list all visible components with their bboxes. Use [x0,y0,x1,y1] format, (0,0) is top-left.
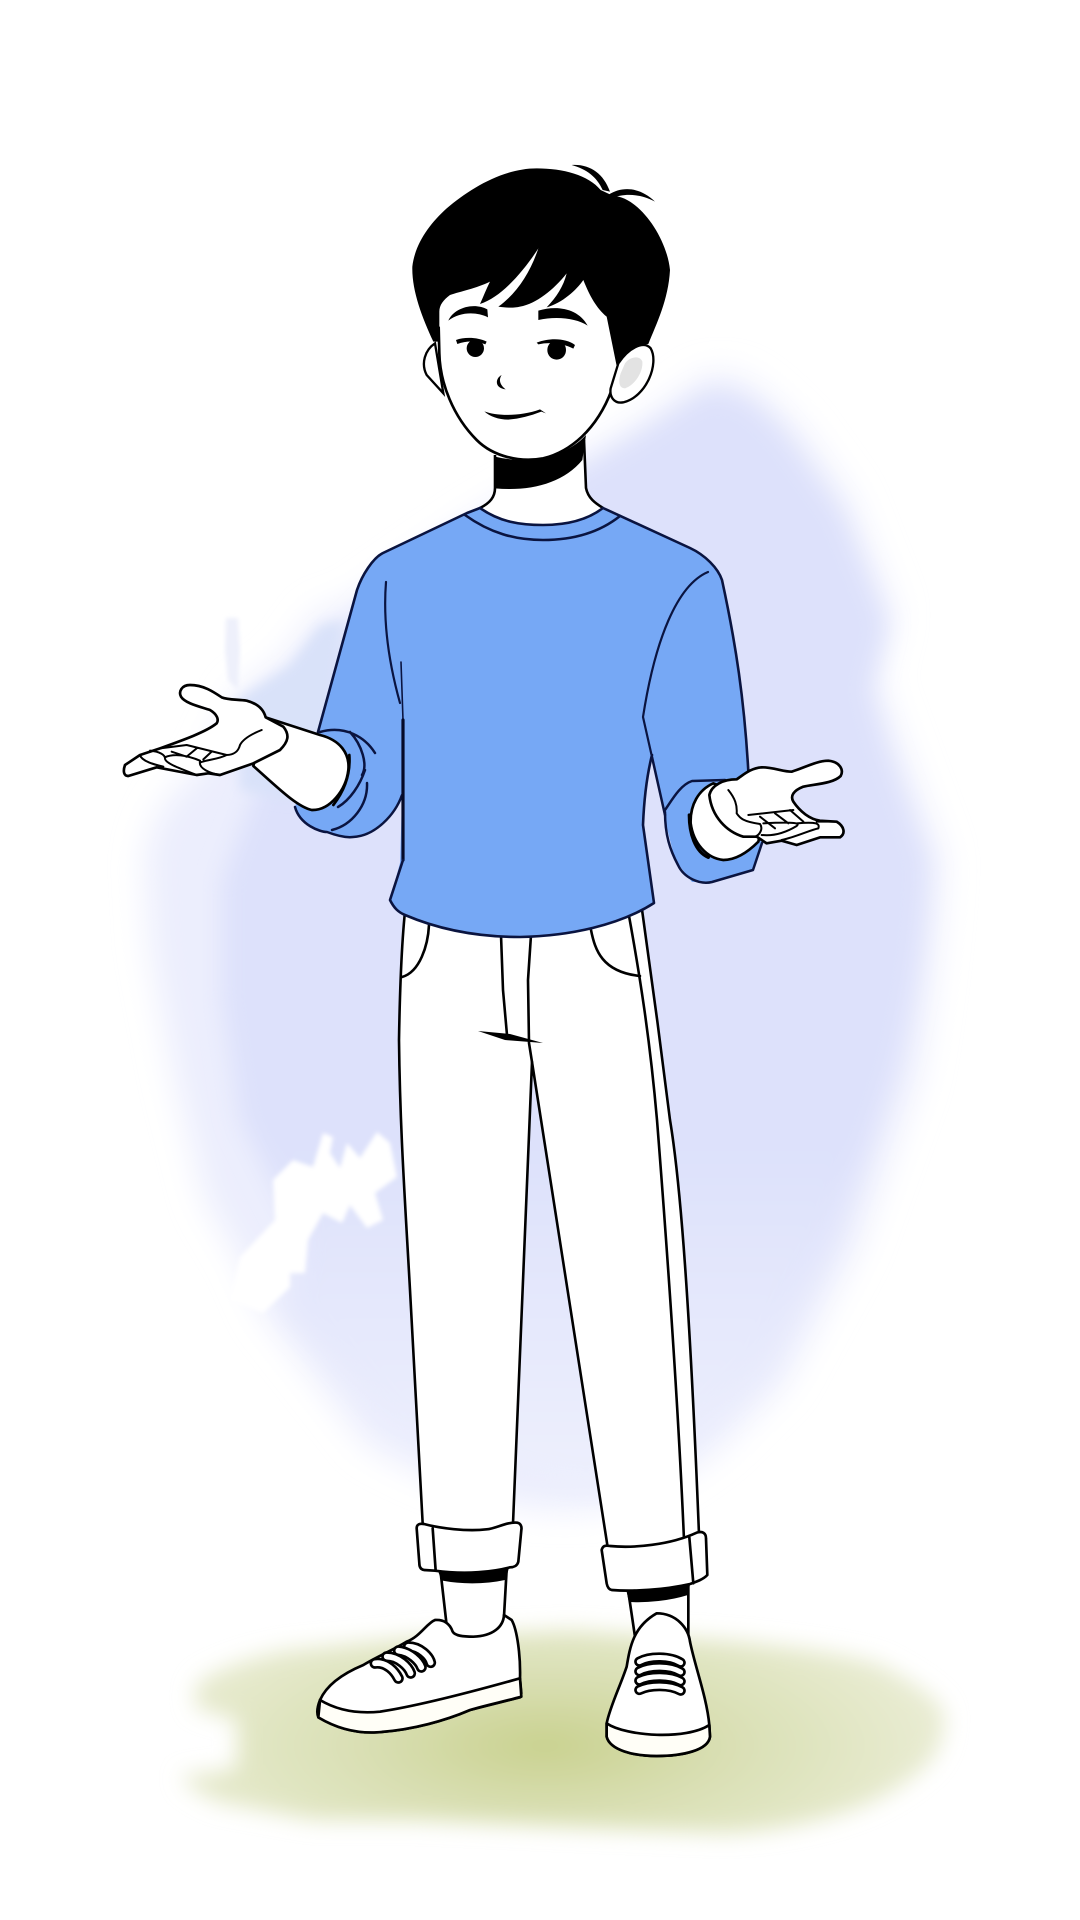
sweater hem [390,755,654,937]
left hand palm [124,685,287,776]
pants pockets [402,925,640,977]
neck [480,440,603,535]
hair [412,168,670,366]
right sleeve and cuff [620,515,762,883]
right trouser cuff [602,1532,707,1591]
right hand palm [709,761,844,845]
left sleeve and cuff [295,553,404,837]
brush mark: white streak lower left [230,1132,397,1313]
right hand and forearm [689,761,844,860]
right shoe [607,1613,710,1756]
right ear [610,345,653,403]
left hand and forearm [124,685,350,810]
sweater seams [385,572,708,757]
ground: olive watercolor shadow [180,1630,945,1833]
left trouser cuff [417,1523,521,1573]
hair wisps [572,165,655,202]
right sock [628,1585,688,1637]
left ear [424,343,443,393]
mouth [484,409,546,420]
pants stripe [627,905,684,1540]
face [437,267,620,460]
pants [399,895,700,1575]
brush mark: faint stroke upper left [225,618,240,690]
torso: blue sweater [318,508,749,937]
left shoe laces [375,1647,431,1678]
right shoe laces [639,1658,681,1691]
background: lavender watercolor blob [145,374,943,1510]
eyes [456,338,575,360]
neck shadow [495,435,586,489]
head [412,165,670,489]
sweater collar [465,515,620,540]
background: pale blue area behind left arm [237,620,345,800]
eyebrows [448,306,588,326]
pants fly [501,935,532,1062]
feet and trouser cuffs [317,1523,710,1756]
nose [497,375,506,389]
left shoe [317,1615,521,1732]
left sock [441,1569,507,1640]
